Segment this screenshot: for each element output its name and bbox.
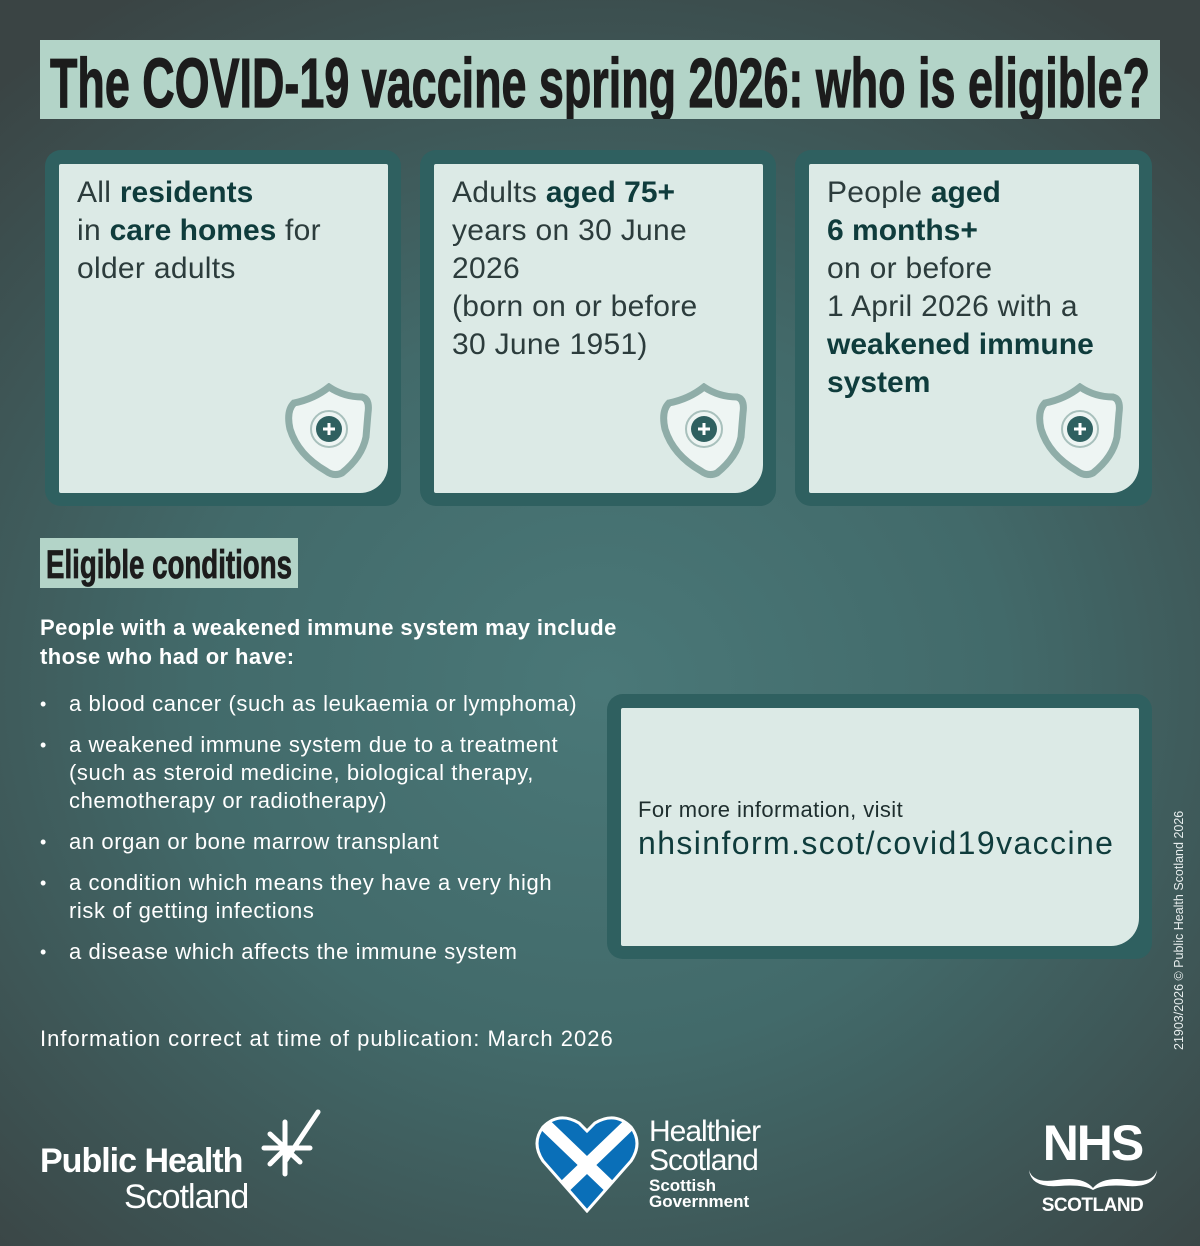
intro text: People with a weakened immune system may include <box>40 615 617 640</box>
copyright vertical: 21903/2026 © Public Health Scotland 2026 <box>1172 811 1186 1050</box>
text: weakened immune: 6 months+ <box>827 214 978 247</box>
logo: healthier scotland: Government <box>649 1192 749 1211</box>
text: weakened immune: 1 April 2026 with a <box>827 290 1078 323</box>
text: aged 75+ <box>452 176 698 361</box>
panel: care homes <box>45 150 401 506</box>
text: care homes: older adults <box>77 252 236 285</box>
bullet list: risk of getting infections <box>69 898 314 923</box>
bullet list: a condition which means they have a very high <box>69 870 552 895</box>
logo: nhs scotland <box>1029 1115 1157 1216</box>
logo: nhs scotland: SCOTLAND <box>1042 1195 1143 1216</box>
logo: healthier scotland: Scotland <box>649 1144 758 1177</box>
text: aged 75+: Adults aged 75+ <box>452 176 675 209</box>
logo: public health scotland <box>40 1110 320 1216</box>
icon: shield <box>285 383 372 478</box>
text: weakened immune: system <box>827 366 930 399</box>
bullet list: an organ or bone marrow transplant <box>69 829 439 854</box>
logo: public health scotland: Public Health <box>40 1142 242 1180</box>
bullet list: a weakened immune system due to a treatment <box>69 732 558 757</box>
intro text <box>40 615 617 669</box>
bullet list <box>40 691 577 964</box>
icon: shield <box>660 383 747 478</box>
intro text: those who had or have: <box>40 644 294 669</box>
text: more info: nhsinform.scot/covid19vaccine <box>638 825 1114 861</box>
panel: aged 75+ <box>420 150 776 506</box>
text: aged 75+: 2026 <box>452 252 520 285</box>
panel: more info <box>607 694 1152 959</box>
logo: public health scotland: Scotland <box>124 1178 248 1216</box>
text: weakened immune: People aged <box>827 176 1001 209</box>
panel: weakened immune <box>795 150 1152 506</box>
text: care homes: All residents <box>77 176 253 209</box>
text: weakened immune: weakened immune <box>827 328 1094 361</box>
text: weakened immune: on or before <box>827 252 992 285</box>
text: more info: For more information, visit <box>638 797 903 822</box>
text: care homes <box>77 176 321 285</box>
text: weakened immune <box>826 176 1094 399</box>
icon: shield <box>1036 383 1123 478</box>
logo: healthier scotland: Scottish <box>649 1176 716 1195</box>
logo: healthier scotland: Healthier <box>649 1115 760 1148</box>
logo: nhs scotland: NHS <box>1043 1115 1142 1171</box>
bullet list: chemotherapy or radiotherapy) <box>69 788 387 813</box>
bullet list: a blood cancer (such as leukaemia or lymphoma) <box>69 691 577 716</box>
text: care homes: in care homes for <box>77 214 321 247</box>
bullet list: (such as steroid medicine, biological therapy, <box>69 760 534 785</box>
text: aged 75+: 30 June 1951) <box>452 328 648 361</box>
bullet list: a disease which affects the immune system <box>69 939 518 964</box>
footer note: Information correct at time of publication: March 2026 <box>40 1026 614 1051</box>
text: more info <box>638 797 1114 861</box>
text: aged 75+: years on 30 June <box>452 214 687 247</box>
logo: healthier scotland <box>536 1115 761 1213</box>
text: aged 75+: (born on or before <box>452 290 698 323</box>
